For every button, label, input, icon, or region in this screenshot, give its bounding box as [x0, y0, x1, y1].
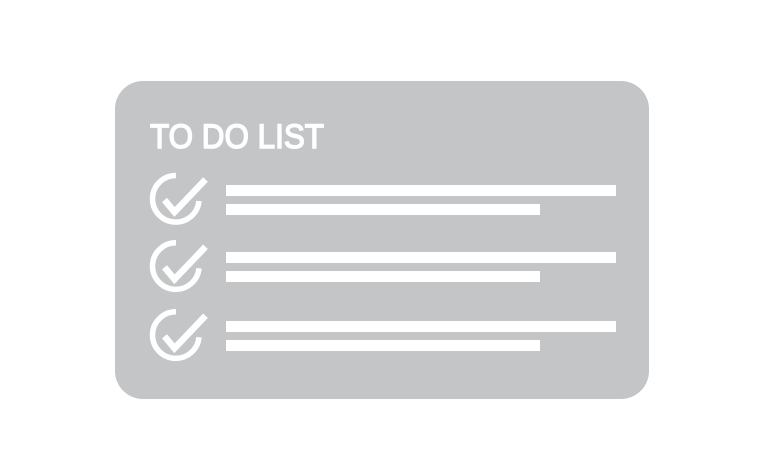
panel: to do list card: [115, 81, 649, 399]
icon: check mark 2: [153, 243, 206, 289]
list item 1: [153, 175, 616, 222]
text line placeholders 3: [226, 321, 616, 351]
list item 3: [153, 312, 616, 358]
title: TO DO LIST: [150, 118, 324, 156]
icon: check mark 3: [153, 312, 206, 358]
text line placeholders 2: [226, 252, 616, 282]
list item 2: [153, 243, 616, 289]
icon: check mark 1: [153, 175, 206, 222]
text line placeholders 1: [226, 185, 616, 215]
